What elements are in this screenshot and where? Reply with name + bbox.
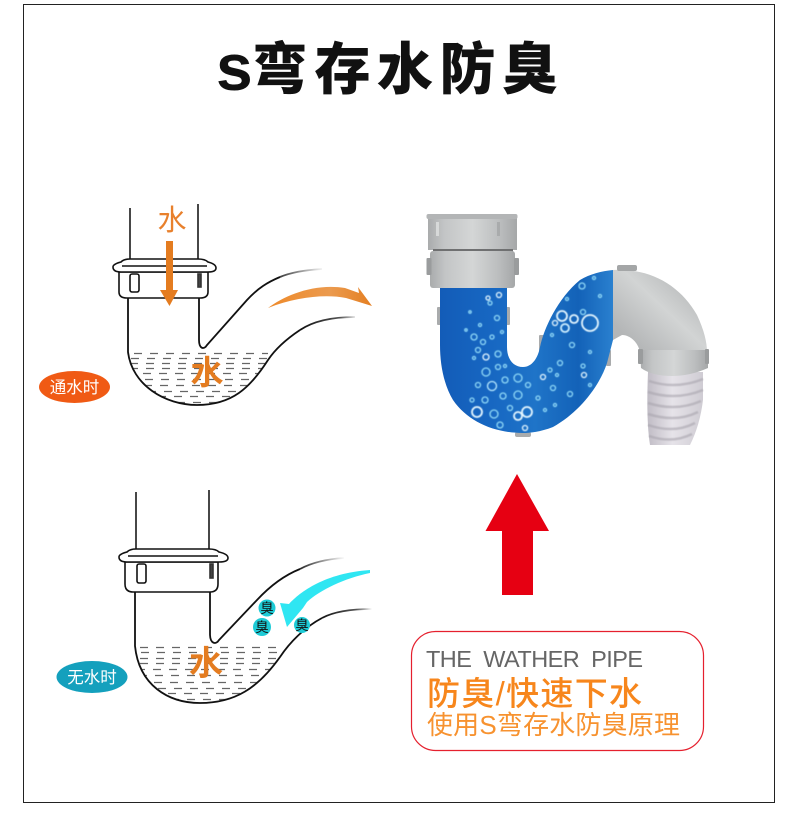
trap inner wall: [199, 277, 280, 348]
diagram: no water, odour blocked: [56, 490, 372, 703]
trap inner wall: [210, 569, 300, 643]
odour markers: 臭: [255, 620, 269, 635]
label: water in trap: 水: [190, 354, 224, 391]
trap lower wall fade: [322, 609, 372, 618]
elbow clip tab: [617, 265, 637, 271]
title: 弯存水防臭: [252, 38, 558, 101]
water dashes: [122, 354, 270, 402]
pipe flange and collar: [113, 259, 216, 298]
water bubbles: [465, 276, 602, 430]
elbow collar: [638, 349, 709, 376]
trap lower wall: [128, 298, 300, 405]
water dashes: [132, 648, 285, 700]
trap lower wall fade: [300, 317, 355, 330]
product photo: S trap with water: [426, 214, 709, 445]
title: s: [216, 30, 253, 104]
top cap: [426, 214, 518, 252]
upper pipe walls: [136, 490, 209, 552]
big red up arrow: [486, 474, 549, 595]
badge: water flowing: 通水时: [50, 378, 99, 397]
label: trapped water: 水: [189, 645, 223, 683]
callout box: [412, 632, 704, 750]
odour arrow: [280, 570, 370, 627]
corrugated hose: [647, 372, 703, 445]
odour markers: [253, 600, 310, 636]
blue water-filled bend: [440, 270, 613, 433]
outflow arrow: [268, 287, 372, 308]
upper pipe walls: [130, 204, 198, 262]
callout english heading: THE WATHER PIPE: [426, 646, 643, 672]
callout main line: 防臭/快速下水: [427, 675, 642, 712]
badge: water flowing: [39, 371, 110, 403]
pipe flange and collar: [119, 549, 228, 592]
lower collar: [426, 251, 519, 288]
callout sub line: 使用S弯存水防臭原理: [427, 710, 680, 740]
grey elbow: [613, 270, 707, 352]
odour markers: 臭: [260, 601, 274, 616]
trap inner wall fade: [300, 558, 344, 569]
label: water above: 水: [157, 204, 187, 237]
trap lower wall: [135, 592, 322, 703]
badge: no water: [56, 661, 128, 693]
trap inner wall fade: [280, 269, 322, 277]
side clips behind blue pipe: [437, 307, 611, 437]
badge: no water: 无水时: [67, 668, 117, 687]
down arrow: [160, 241, 178, 306]
odour markers: 臭: [295, 618, 309, 633]
diagram: water flowing through trap: [39, 204, 372, 405]
